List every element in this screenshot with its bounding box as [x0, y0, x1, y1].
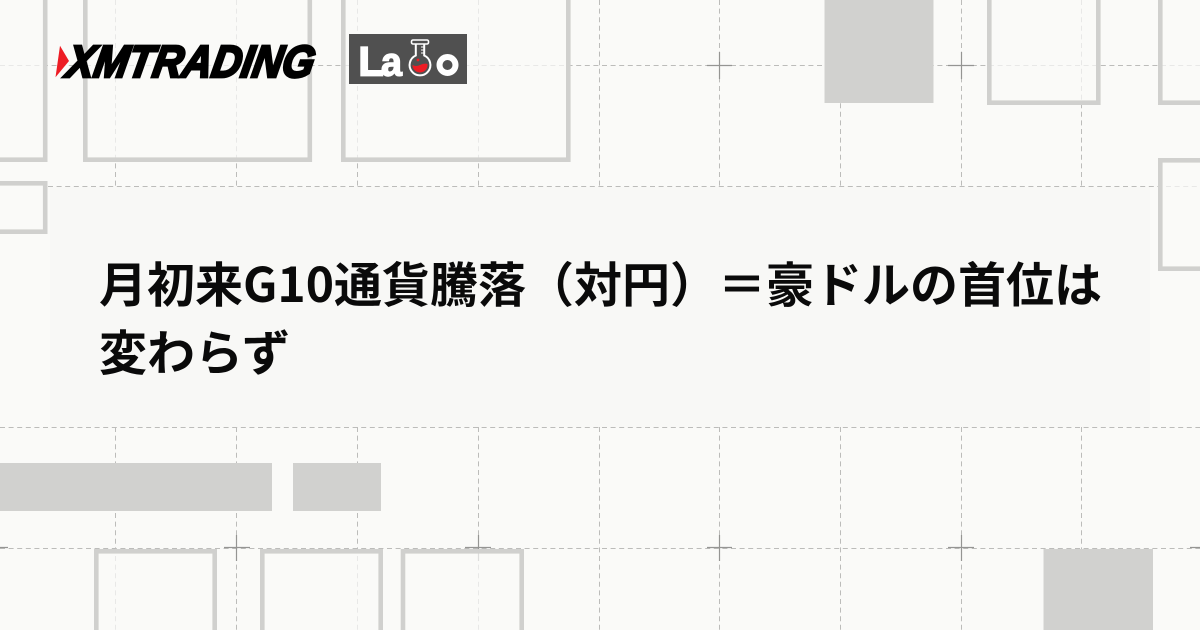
title [99, 246, 1102, 384]
logo: Lab [349, 34, 467, 84]
logo: XMTRADING [56, 36, 319, 87]
logo plate [349, 34, 467, 84]
icon: flask [410, 40, 430, 75]
title: 月初来G10通貨騰落（対円）＝豪ドルの首位は [99, 246, 1102, 316]
logo: Lab: a [381, 40, 403, 84]
outlined squares: top row [0, 0, 1200, 269]
outlined squares: bottom row [96, 551, 522, 630]
letter o [440, 57, 456, 73]
title panel tint [50, 187, 1150, 427]
wordmark: XMTRADING [61, 36, 319, 87]
letters La: L [358, 38, 384, 84]
red arrow mark [56, 46, 69, 77]
title: 変わらず [99, 314, 290, 384]
